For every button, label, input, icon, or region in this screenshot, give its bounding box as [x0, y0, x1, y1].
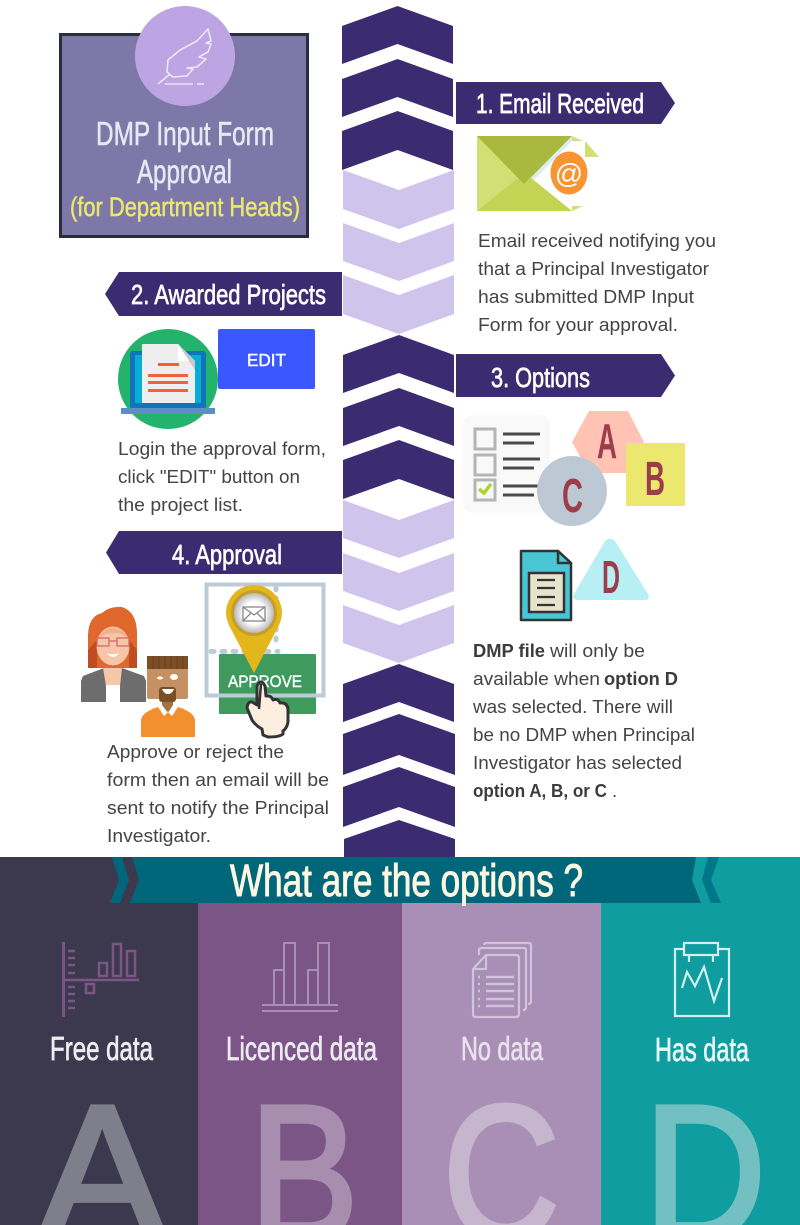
approve button: APPROVE	[228, 672, 302, 691]
title text: DMP Input Form	[96, 115, 274, 152]
step 3 heading	[456, 354, 675, 397]
step 1 text	[478, 230, 716, 335]
map pin	[226, 585, 282, 673]
option badge A: A	[597, 415, 617, 469]
hand pointer	[247, 682, 288, 737]
step 3 text: will only be	[549, 640, 645, 661]
panel: option A	[0, 857, 198, 1225]
icon: document on laptop	[118, 329, 218, 429]
step 1 text: that a Principal Investigator	[478, 258, 709, 279]
step 3 text: available when	[473, 668, 600, 689]
step 4 text: Investigator.	[107, 825, 211, 846]
step 2 text: click "EDIT" button on	[118, 466, 300, 487]
step 3 text: Investigator has selected	[473, 752, 682, 773]
step 4 text: sent to notify the Principal	[107, 797, 329, 818]
step 4 text	[107, 741, 329, 846]
panel: option C	[402, 857, 601, 1225]
step 2 text	[118, 438, 326, 515]
central chevron column	[342, 6, 455, 858]
option badge C: C	[562, 470, 583, 523]
banner: what are the options: What are the options ?	[230, 855, 583, 906]
option badge C	[537, 456, 607, 526]
step 3 text: .	[612, 780, 617, 801]
step 4 text: Approve or reject the	[107, 741, 284, 762]
option badge B	[626, 443, 685, 506]
icon: bar chart	[262, 943, 338, 1011]
icon: bar chart with axis	[64, 942, 139, 1017]
step 1 text: Form for your approval.	[478, 314, 678, 335]
option badge B: B	[645, 453, 665, 506]
icon: document stack	[473, 943, 531, 1017]
step 2 text: the project list.	[118, 494, 243, 515]
page frame	[206, 584, 324, 696]
title text	[70, 115, 300, 222]
illustration: approve button with pin and hand	[206, 584, 324, 737]
icon: feather quill	[135, 6, 235, 106]
step 3 text: DMP file	[473, 640, 545, 661]
illustration: woman	[81, 607, 146, 702]
icon: email envelope: @	[555, 158, 583, 189]
step 1 text: has submitted DMP Input	[478, 286, 694, 307]
option badge D	[573, 538, 649, 603]
illustration: man	[141, 656, 195, 737]
step 1 heading	[456, 82, 675, 124]
step 3 text: was selected. There will	[472, 696, 673, 717]
icon: checklist	[463, 415, 550, 513]
step 2 heading	[105, 272, 342, 316]
label: has data: Has data	[655, 1031, 749, 1068]
icon: DMP file	[521, 551, 571, 620]
panel: option B	[198, 857, 402, 1225]
icon: email envelope	[477, 136, 599, 211]
step 2 heading: 2. Awarded Projects	[131, 279, 326, 310]
approve button	[219, 654, 316, 714]
step 4 heading	[106, 531, 342, 574]
step 1 text: Email received notifying you	[478, 230, 716, 251]
label: licenced data: Licenced data	[226, 1030, 377, 1067]
EDIT button: EDIT	[247, 350, 286, 370]
step 3 heading: 3. Options	[491, 362, 590, 393]
option badge A	[572, 411, 644, 473]
option badge D: D	[602, 551, 620, 603]
step 4 heading: 4. Approval	[172, 539, 282, 570]
step 3 text: be no DMP when Principal	[473, 724, 695, 745]
step 3 text: option D	[604, 668, 678, 689]
label: free data: Free data	[50, 1030, 153, 1067]
step 3 text	[472, 640, 695, 801]
step 1 heading: 1. Email Received	[476, 88, 644, 119]
step 2 text: Login the approval form,	[118, 438, 326, 459]
step 3 text: option A, B, or C	[473, 780, 607, 801]
title text: (for Department Heads)	[70, 192, 300, 222]
EDIT button	[218, 329, 315, 389]
title text: Approval	[137, 153, 232, 190]
label: no data: No data	[461, 1030, 543, 1067]
icon: clipboard chart	[675, 943, 729, 1016]
panel: option D	[601, 857, 800, 1225]
step 4 text: form then an email will be	[107, 769, 329, 790]
title panel	[60, 6, 308, 236]
